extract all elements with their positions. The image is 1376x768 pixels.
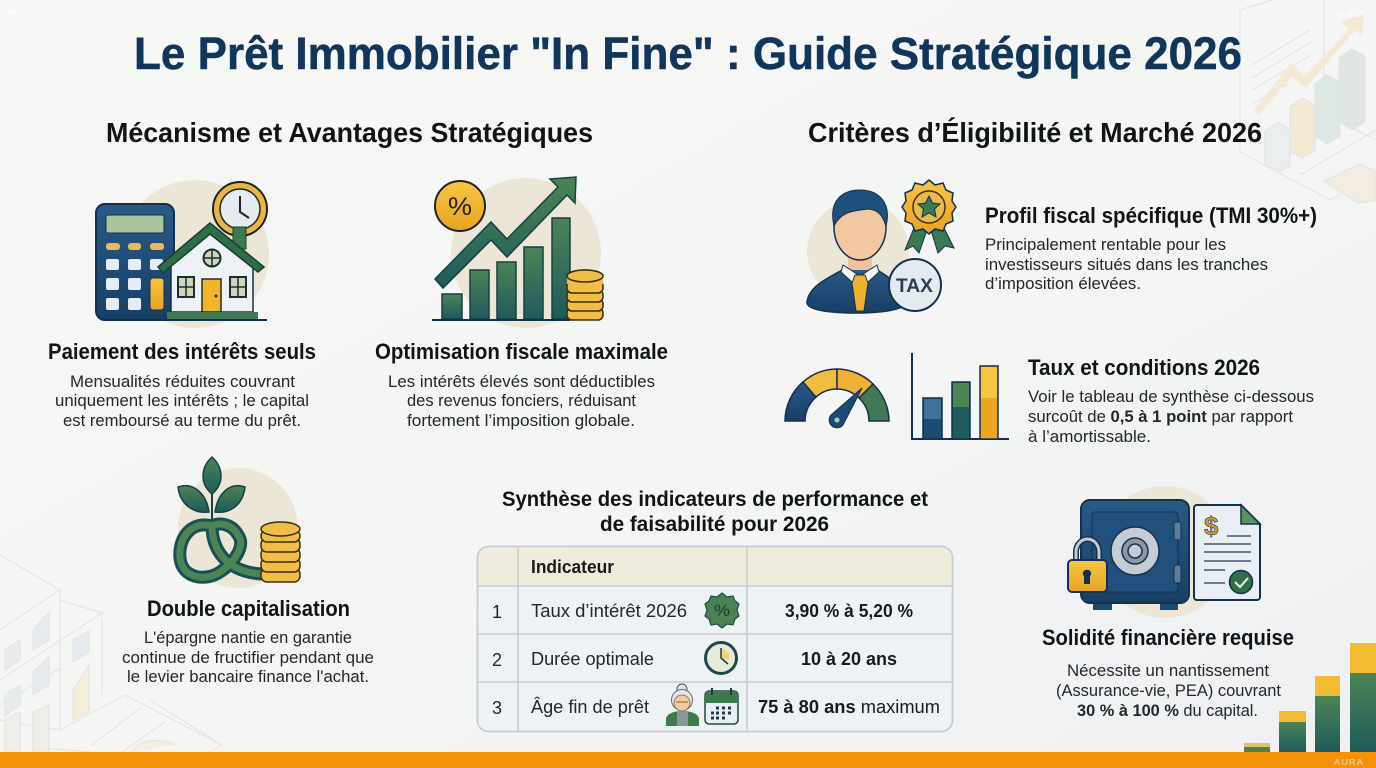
icon: investor with medal and tax badge [807,180,956,313]
row 2 [492,642,897,674]
text block: financial solidity: (Assurance-vie, PEA) couvrant [1056,681,1281,700]
table title [502,488,928,536]
text block: interest-only payment: est remboursé au terme du prêt. [63,411,301,430]
heading: eligibility criteria and market: Critères d’Éligibilité et Marché 2026 [808,117,1262,148]
table header: Indicateur [531,557,614,577]
text block: double capitalisation: continue de fructifier pendant que [122,648,374,667]
text block: financial solidity [1042,625,1294,720]
text block: double capitalisation: le levier bancaire finance l'achat. [127,667,369,686]
background: bottom-right bars [1244,643,1376,752]
text block: tax profile: Principalement rentable pour les [985,235,1226,254]
icon: calculator, house and clock [96,180,269,328]
row 3 [492,684,940,726]
icon: gauge [785,369,889,428]
row 3: Âge fin de prêt [531,697,649,717]
icon: investor with medal and tax badge: TAX [896,276,933,297]
text block: interest-only payment: Mensualités réduites couvrant [70,372,295,391]
row 1: Taux d’intérêt 2026 [531,601,687,621]
row 1 [492,593,913,628]
table title: de faisabilité pour 2026 [600,513,829,536]
text block: tax optimisation: Optimisation fiscale maximale [375,339,668,364]
text block: double capitalisation: Double capitalisation [147,596,350,621]
bottom orange band [0,752,1376,768]
text block: tax optimisation: Les intérêts élevés sont déductibles [388,372,655,391]
text block: tax profile: investisseurs situés dans les tranches [985,255,1268,274]
text block: financial solidity: 30 % à 100 % du capital. [1077,701,1258,720]
row 2: 2 [492,650,502,670]
text block: interest-only payment [48,339,316,430]
coin stack [567,270,603,320]
row 1: 1 [492,602,502,622]
title: Le Prêt Immobilier "In Fine" : Guide Stratégique 2026 [134,28,1242,79]
icon: safe, padlock and document [1068,486,1260,618]
icon: growth chart with percent and coins [432,177,603,328]
row 3: 3 [492,698,502,718]
brand marks: AURA [1334,758,1364,767]
row 1: % [714,601,730,620]
heading: mechanism and advantages: Mécanisme et Avantages Stratégiques [106,117,593,148]
table title: Synthèse des indicateurs de performance et [502,488,928,511]
row 1: 3,90 % à 5,20 % [785,601,913,621]
text block: tax optimisation [375,339,668,430]
background: bottom-left buildings illustration [0,555,222,768]
icon: three bar chart [912,353,1009,439]
text block: tax profile: Profil fiscal spécifique (TMI 30%+) [985,203,1317,228]
brand marks: AURA [3,10,21,16]
text block: double capitalisation: L'épargne nantie en garantie [144,628,352,647]
text block: interest-only payment: Paiement des intérêts seuls [48,339,316,364]
brand marks: AURA [1335,9,1365,19]
text block: rates and conditions: surcoût de 0,5 à 1 point par rapport [1028,407,1293,426]
text block: tax profile [985,203,1317,293]
icon: plant, loop and coins [178,457,300,588]
text block: rates and conditions [1028,355,1314,446]
coin stack [261,522,300,582]
text block: rates and conditions: à l’amortissable. [1028,427,1151,446]
table: 2026 indicators [478,546,952,732]
row 3: 75 à 80 ans maximum [758,697,940,717]
text block: tax optimisation: fortement l’imposition globale. [407,411,635,430]
text block: interest-only payment: uniquement les intérêts ; le capital [55,391,309,410]
text block: rates and conditions: Taux et conditions 2026 [1028,355,1260,380]
text block: rates and conditions: Voir le tableau de synthèse ci-dessous [1028,387,1314,406]
text block: financial solidity: Solidité financière requise [1042,625,1294,650]
text block: financial solidity: Nécessite un nantissement [1067,661,1269,680]
text block: tax optimisation: des revenus fonciers, réduisant [407,391,636,410]
background: top-right growth chart illustration [1240,0,1376,203]
text block: tax profile: d’imposition élevées. [985,274,1141,293]
icon: safe, padlock and document: $ [1204,511,1219,541]
text block: double capitalisation [122,596,374,686]
icon: growth chart with percent and coins: % [448,193,472,221]
row 2: Durée optimale [531,649,654,669]
row 2: 10 à 20 ans [801,649,897,669]
